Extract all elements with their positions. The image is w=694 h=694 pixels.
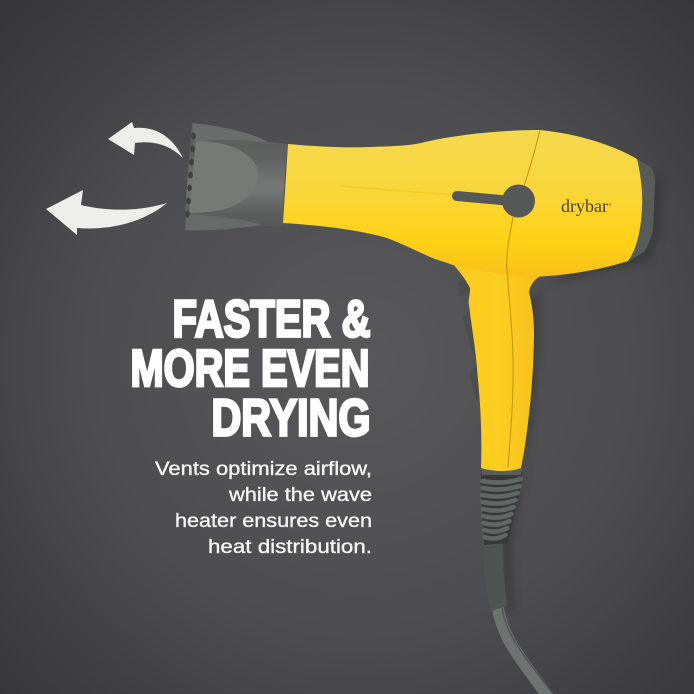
nozzle xyxy=(185,123,288,230)
nozzle inner panel xyxy=(189,141,258,213)
brand logo: drybar xyxy=(561,196,608,216)
dryer shadow xyxy=(500,170,662,610)
title: MORE EVEN xyxy=(130,340,370,398)
handle xyxy=(453,250,540,471)
nozzle top flange xyxy=(192,123,268,142)
body text: Vents optimize airflow, xyxy=(155,458,372,480)
dryer body xyxy=(283,130,642,277)
title: DRYING xyxy=(212,390,370,448)
title xyxy=(130,290,370,448)
body crease highlight xyxy=(340,186,455,195)
nozzle bottom flange xyxy=(185,214,262,230)
nozzle vents xyxy=(185,133,196,217)
cord sleeve xyxy=(483,541,507,611)
body text: heater ensures even xyxy=(175,510,372,532)
power cord xyxy=(498,608,553,694)
body seam line xyxy=(507,130,540,467)
title: FASTER & xyxy=(172,290,370,348)
hair dryer xyxy=(185,123,662,694)
rear cap xyxy=(625,158,655,263)
icon: lower airflow arrow xyxy=(46,190,167,235)
icon: upper airflow arrow xyxy=(108,122,183,158)
body text: while the wave xyxy=(228,484,372,506)
body text: heat distribution. xyxy=(208,536,372,558)
slider switch xyxy=(457,184,535,218)
body text xyxy=(155,458,372,558)
cord strain relief rings xyxy=(481,468,522,545)
brand logo: ® xyxy=(608,202,612,207)
side buttons xyxy=(459,279,482,401)
